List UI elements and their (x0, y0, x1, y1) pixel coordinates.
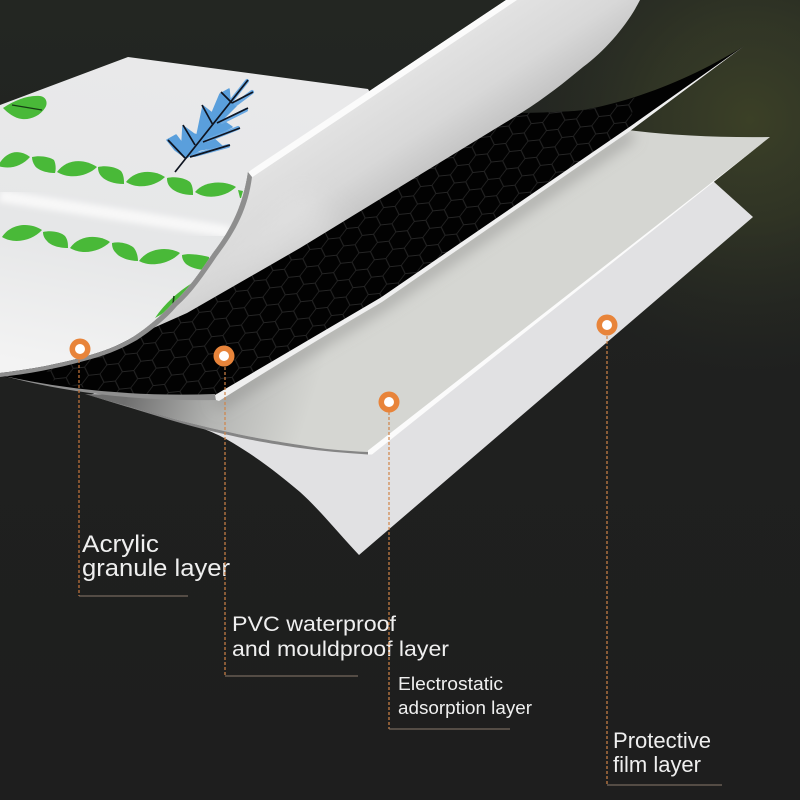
callout: acrylic granule layer (70, 338, 230, 596)
paper face (0, 57, 372, 373)
curl grey edge (0, 172, 252, 377)
callout: PVC layer: and mouldproof layer (232, 638, 449, 661)
callout: protective film layer (596, 314, 722, 785)
callout: protective film layer: Protective (613, 728, 711, 753)
callout: PVC layer (214, 346, 449, 676)
protective film sheet (90, 181, 753, 555)
curl white edge strip (248, 0, 517, 178)
PVC black hexagon sheet (0, 46, 744, 401)
leaf mark near curl (173, 296, 174, 304)
fold crease (0, 196, 230, 232)
callout: electrostatic layer (378, 392, 532, 729)
callout: PVC layer: PVC waterproof (232, 613, 396, 636)
underside light patch (190, 219, 339, 311)
curled underside of top sheet (130, 0, 640, 345)
leaf chain row two (2, 225, 209, 318)
callout: protective film layer: film layer (613, 752, 701, 777)
leaf chain row one (0, 152, 243, 198)
icon: blue fern leaf (167, 80, 253, 172)
callout: electrostatic layer: Electrostatic (398, 674, 503, 694)
green leaf top (3, 96, 47, 119)
callout: acrylic granule layer: Acrylic (82, 531, 159, 558)
acrylic top sheet with printed pattern (0, 57, 372, 373)
electrostatic adsorption sheet (85, 130, 770, 454)
callout: acrylic granule layer: granule layer (82, 555, 230, 582)
callout: electrostatic layer: adsorption layer (398, 698, 532, 718)
